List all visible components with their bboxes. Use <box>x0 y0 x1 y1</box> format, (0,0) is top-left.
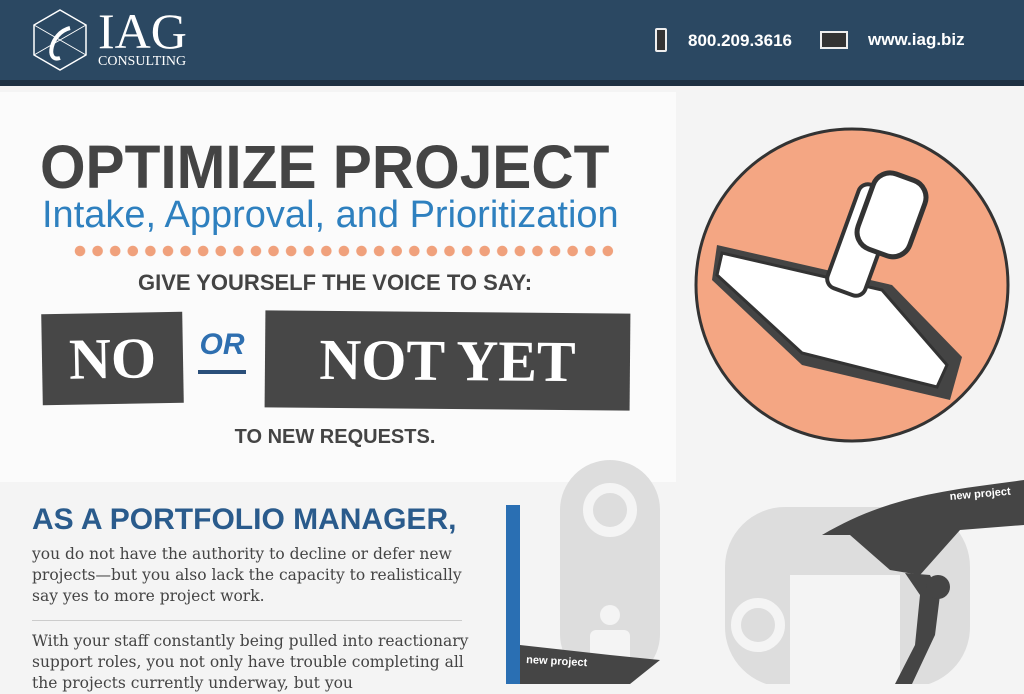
prompt: GIVE YOURSELF THE VOICE TO SAY: <box>138 270 532 295</box>
subtitle: Intake, Approval, and Prioritization <box>42 194 619 236</box>
logo: CONSULTING <box>98 54 186 69</box>
paragraph 1: you do not have the authority to decline or defer new projects—but you also lack the capacity to realistically say yes to more project work. <box>32 545 462 605</box>
dots row <box>74 245 620 257</box>
paragraph 2: With your staff constantly being pulled into reactionary support roles, you not only have trouble completing all the projects currently underway, but you <box>32 632 468 692</box>
contact info <box>655 28 965 52</box>
bottom illustration: new project <box>526 654 588 669</box>
header bar <box>0 0 1024 86</box>
bottom illustration: new project <box>949 486 1011 503</box>
to new requests: TO NEW REQUESTS. <box>235 426 435 448</box>
NOT YET box: NOT YET <box>319 327 576 394</box>
contact info: www.iag.biz <box>868 30 965 49</box>
left white area <box>0 92 676 482</box>
logo: IAG <box>98 3 187 59</box>
blue vertical bar <box>506 505 520 684</box>
logo <box>33 3 187 71</box>
OR: OR <box>200 328 244 361</box>
bottom illustration <box>520 460 1024 684</box>
title: OPTIMIZE PROJECT <box>40 133 609 201</box>
contact info: 800.209.3616 <box>688 31 792 50</box>
stamp circle illustration <box>694 128 1010 442</box>
OR <box>198 328 246 374</box>
NO box <box>41 312 184 405</box>
heading: AS A PORTFOLIO MANAGER, <box>32 503 456 536</box>
NO box: NO <box>68 325 157 392</box>
NOT YET box <box>265 310 630 411</box>
portfolio manager section <box>32 503 468 692</box>
